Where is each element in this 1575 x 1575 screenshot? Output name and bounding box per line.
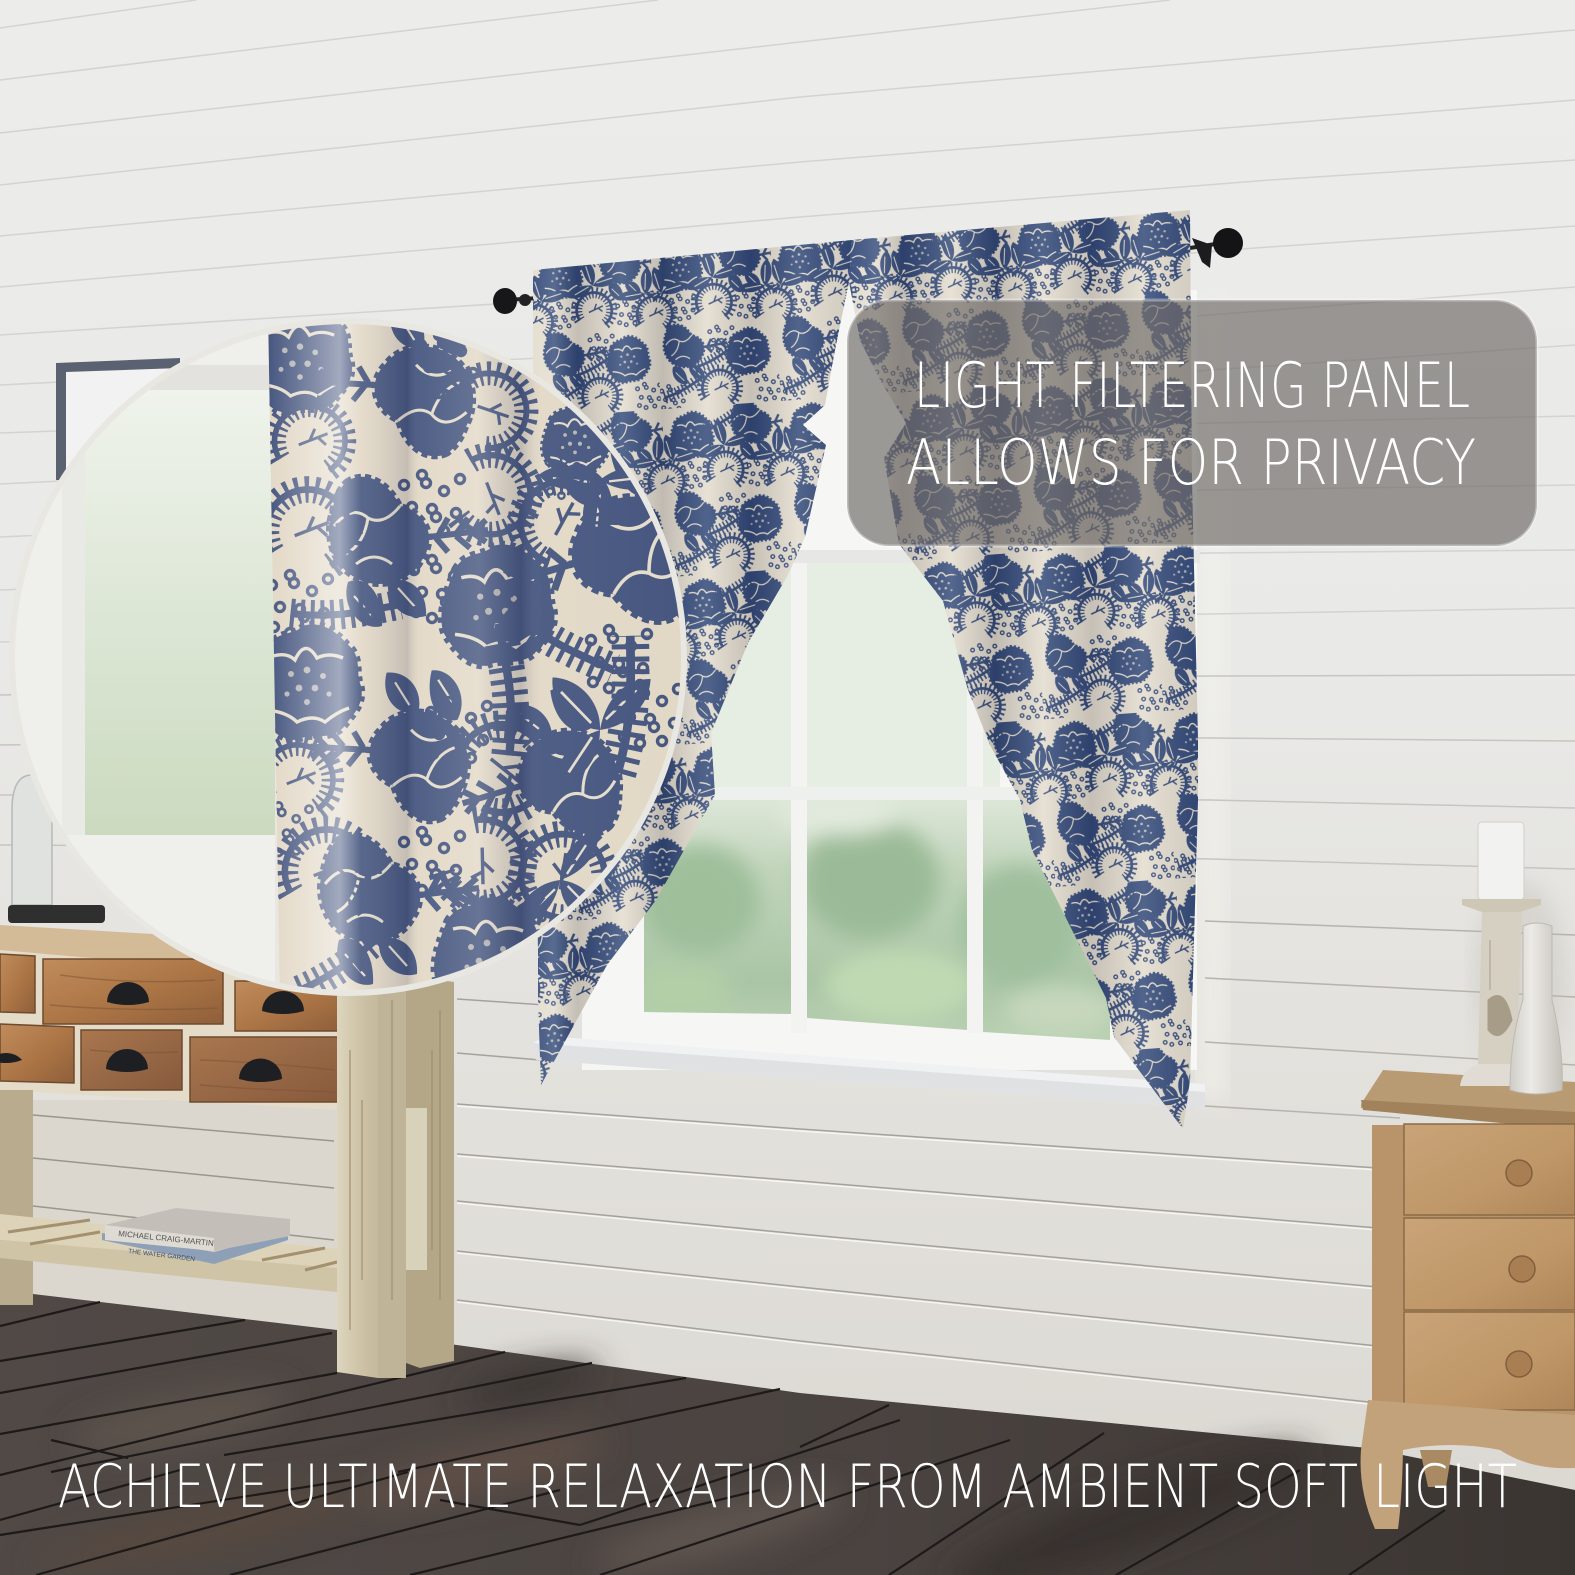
upper panes — [700, 563, 1000, 787]
curtain rod and finials — [493, 228, 1243, 314]
window — [533, 290, 1205, 1108]
table top and front — [0, 925, 340, 1110]
callout panel — [847, 300, 1537, 546]
candle holder — [1460, 822, 1566, 1086]
glass cloche and base — [8, 775, 105, 923]
books — [102, 1208, 290, 1264]
blurred window in lens — [15, 334, 275, 982]
white vase — [1510, 923, 1562, 1094]
left leg — [0, 1090, 33, 1305]
large leg — [337, 975, 378, 1378]
books: MICHAEL CRAIG-MARTIN — [118, 1229, 214, 1248]
floor — [0, 1290, 1575, 1575]
console table — [0, 925, 454, 1378]
wooden dresser — [1361, 1070, 1575, 1529]
right curtain panel — [840, 200, 1210, 1140]
lower panes — [630, 795, 1120, 1045]
callout text line 2: ALLOWS FOR PRIVACY — [906, 426, 1476, 499]
shelf — [0, 1214, 337, 1268]
magnified fabric lens — [0, 286, 704, 1013]
fabric close-up — [268, 324, 681, 990]
books: THE WATER GARDEN — [128, 1248, 196, 1263]
picture frame behind lens — [56, 358, 180, 480]
drawers — [0, 954, 339, 1102]
left curtain panel — [520, 230, 860, 1090]
wall under table — [33, 1100, 337, 1332]
cup handles — [0, 982, 304, 1082]
window sill — [533, 1036, 1205, 1108]
